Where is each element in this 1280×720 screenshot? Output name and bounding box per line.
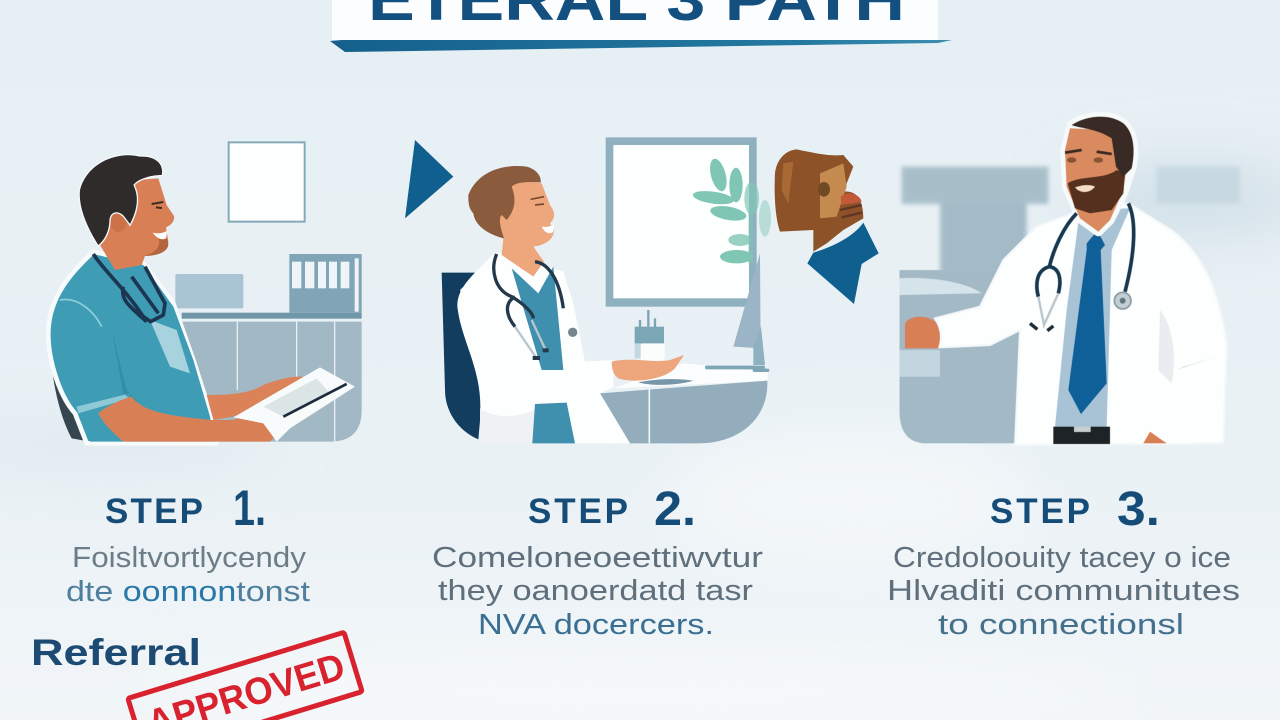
skin at pocket (1143, 432, 1167, 443)
step 1 heading: STEP (105, 492, 203, 531)
plant (692, 157, 771, 263)
step 1 description: dte oonnon tonst (66, 576, 310, 608)
step 2 heading: 2. (654, 483, 696, 536)
doctor head (468, 166, 554, 277)
chair (50, 347, 90, 442)
blurred clinic backdrop (899, 167, 1240, 443)
scrubs (512, 267, 575, 443)
panel: step 1 illustration (48, 142, 362, 443)
step 3 heading: STEP (990, 492, 1090, 531)
shirt (1055, 208, 1130, 427)
doctor coat (935, 203, 1227, 445)
panel: step 2 illustration (405, 137, 879, 443)
title underline (330, 40, 952, 52)
nurse torso (48, 252, 217, 443)
step 3 heading (990, 483, 1160, 536)
nurse arms and hands (98, 377, 305, 442)
step 1 heading: 1. (233, 480, 266, 536)
floating blue collar (807, 223, 879, 304)
step 3 description: Credoloouity tacey o ice (893, 542, 1231, 574)
nurse head (80, 155, 174, 270)
panel: step 3 illustration (899, 117, 1240, 445)
desk top (613, 363, 768, 388)
clipboard (233, 367, 355, 442)
step 3 description: to connectionsl (938, 609, 1184, 641)
step 3 heading: 3. (1117, 483, 1160, 536)
stethoscope (494, 254, 577, 360)
chair (442, 273, 483, 439)
step 1 description (66, 542, 310, 608)
step 2 description: NVA docercers. (478, 609, 714, 641)
stethoscope (93, 254, 165, 322)
step 2 description (432, 542, 763, 641)
step 2 description: Comeloneoeettiwvtur (432, 542, 763, 574)
doctor coat (457, 253, 630, 443)
doctor hand (612, 355, 684, 381)
monitor (705, 253, 769, 372)
binders (289, 254, 362, 313)
desk (600, 379, 767, 443)
belt (1053, 427, 1110, 444)
step 3 description: Hlvaditi communitutes (887, 575, 1240, 607)
step 2 heading: STEP (528, 492, 628, 531)
floating head fragment (775, 149, 863, 252)
tie (1068, 231, 1107, 414)
pen cup (635, 310, 665, 363)
step 3 description (887, 542, 1240, 641)
stethoscope (1030, 203, 1134, 331)
title banner (330, 0, 952, 52)
step 1 description: Foisltvortlycendy (72, 542, 307, 574)
step 1 heading (105, 480, 266, 536)
doctor head (1065, 117, 1134, 232)
doctor hand (905, 317, 942, 348)
arrow triangle (405, 140, 453, 218)
desk box (175, 274, 243, 308)
referral label: Referral (31, 632, 201, 673)
cabinet (182, 313, 362, 442)
step 2 description: they oanoerdatd tasr (438, 575, 753, 607)
wall frame (229, 142, 305, 222)
window frame (606, 137, 757, 307)
step 2 heading (528, 483, 696, 536)
